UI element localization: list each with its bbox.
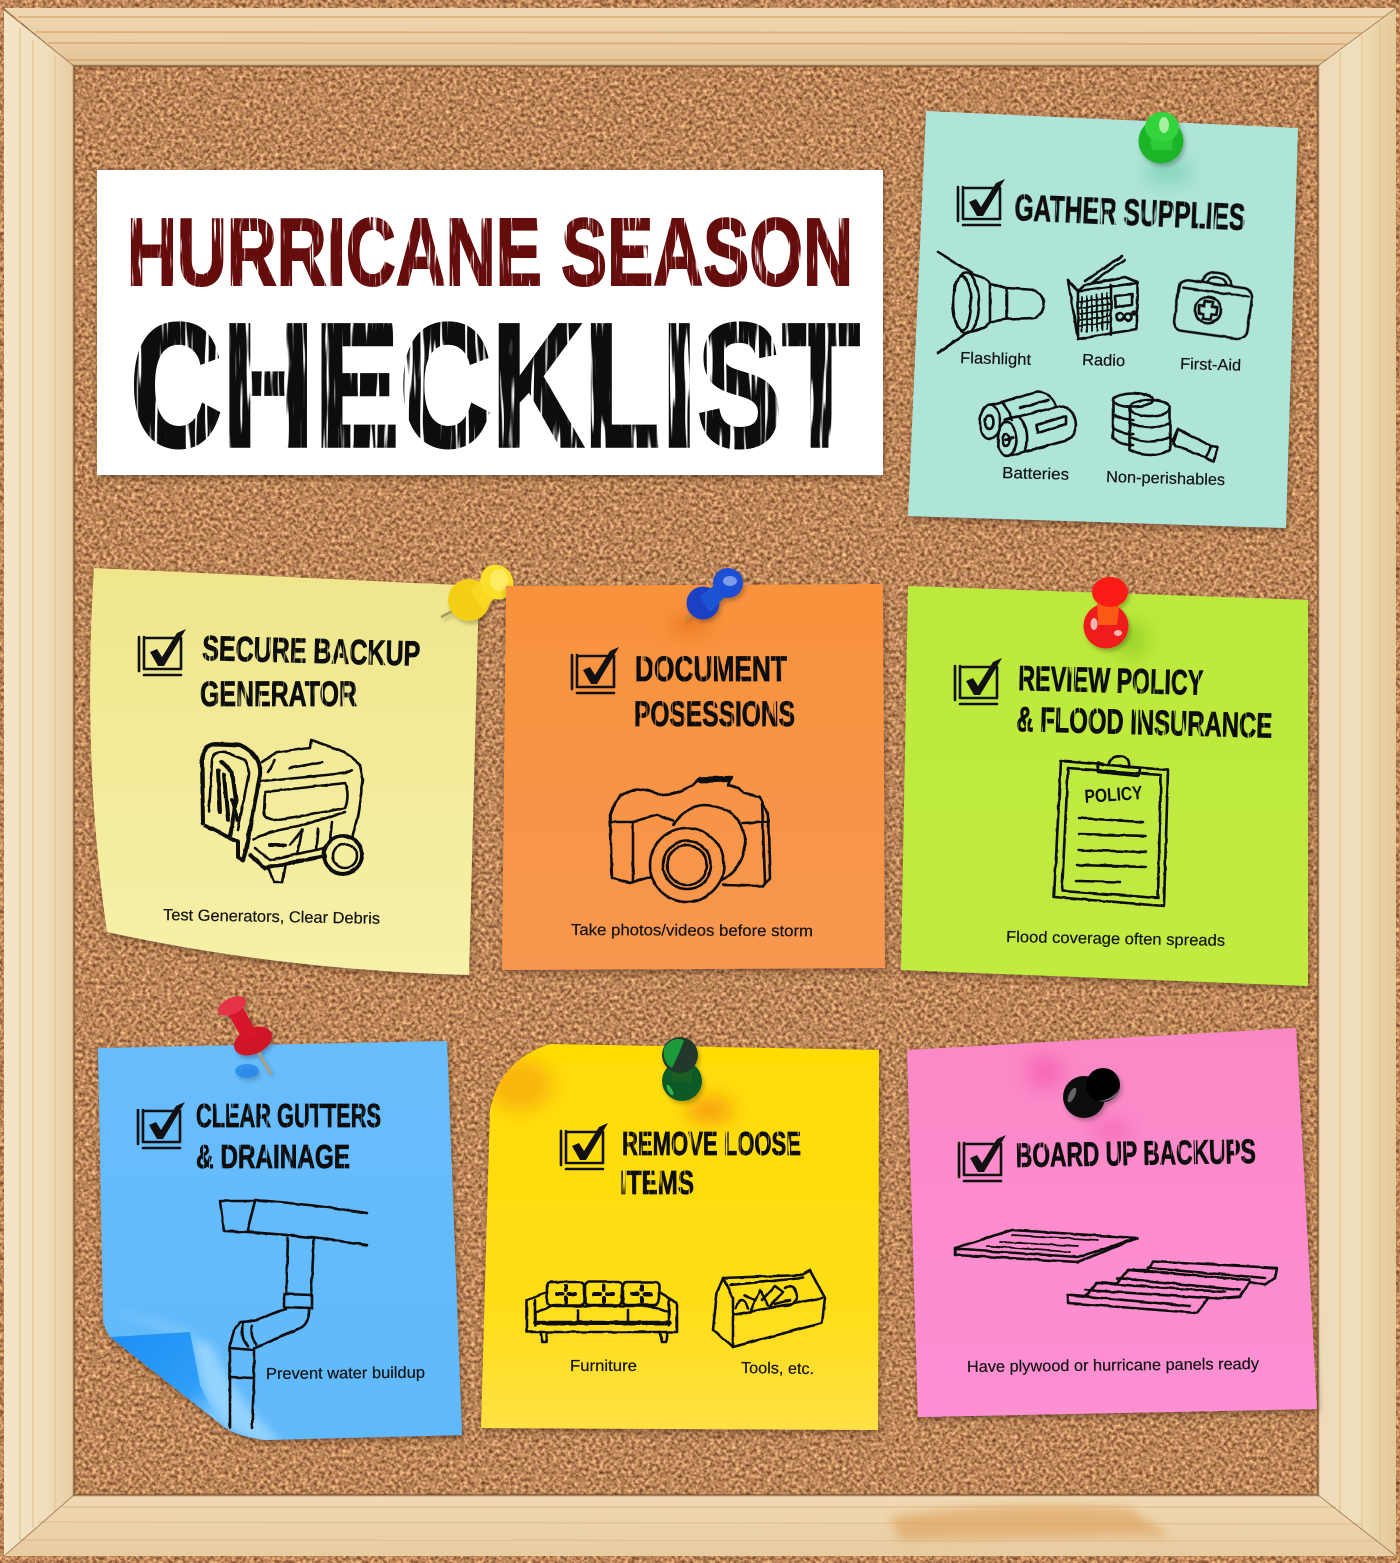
heading: secure backup generator: GENERATOR [200,675,357,714]
label: first-aid: First-Aid [1180,356,1241,375]
heading: clear gutters [196,1097,381,1175]
checkbox icon [958,179,1005,225]
checkbox icon [561,1123,608,1169]
caption: test generators: Test Generators, Clear Debris [163,907,380,928]
icon: flashlight [938,252,1044,353]
label: flashlight: Flashlight [960,350,1032,369]
panel: document possessions [502,584,885,970]
checkbox icon [959,1135,1006,1181]
label: tools: Tools, etc. [741,1360,814,1378]
caption: prevent water buildup: Prevent water buildup [266,1365,425,1383]
label: radio: Radio [1082,352,1125,370]
title line: Hurricane Season: HURRICANE SEASON [127,199,853,306]
icon: toolbox [713,1270,825,1347]
pin shadow on note [668,615,712,635]
pin: green [1138,112,1184,164]
pin: dark green [662,1037,702,1101]
icon: gutter and downspout [220,1200,367,1428]
icon: radio [1068,256,1137,339]
title line: Checklist: CHECKLIST [130,288,860,484]
page curl [110,1332,218,1422]
checkbox icon [955,658,1002,704]
caption: take photos: Take photos/videos before storm [571,922,813,940]
icon: policy clipboard [1054,756,1168,906]
heading: review policy [1016,659,1273,746]
heading: document posessions: DOCUMENT [635,650,787,689]
panel: review policy and flood insurance [901,586,1308,986]
pin: black [1063,1068,1120,1118]
label: non-perishables: Non-perishables [1106,469,1225,489]
icon: corrugated panels [1068,1261,1277,1313]
checkbox icon [139,629,186,675]
icon: camera [610,777,770,902]
panel: secure backup generator [90,568,479,975]
icon: batteries [980,392,1076,456]
curl highlight [140,1318,284,1440]
policy label on clipboard: POLICY [1084,783,1143,808]
heading: gather supplies: GATHER SUPPLIES [1014,187,1246,238]
label: batteries: Batteries [1002,465,1069,484]
checkbox icon [572,647,619,693]
heading: secure backup generator: SECURE BACKUP [202,629,421,674]
pin glows [1027,1056,1132,1140]
heading: document posessions: POSESSIONS [634,695,795,734]
pin: red [1084,577,1128,648]
heading: secure backup generator [200,629,421,714]
icon: first aid kit [1173,267,1255,340]
pin: blue [684,568,743,620]
heading: remove loose items: ITEMS [620,1164,694,1201]
pin shadow on note [1112,622,1148,658]
title card [97,170,883,484]
heading: document posessions [634,650,795,734]
panel: remove loose items [481,1044,879,1430]
icon: generator [202,740,363,882]
caption: flood coverage: Flood coverage often spreads [1006,929,1225,950]
orange glows [488,1059,734,1124]
heading: remove loose items: REMOVE LOOSE [622,1125,801,1162]
icon: non-perishables [1113,393,1218,462]
checkbox icon [138,1102,185,1148]
caption: plywood or panels: Have plywood or hurricane panels ready [967,1356,1259,1376]
heading: board up backups: BOARD UP BACKUPS [1015,1133,1256,1175]
pin shadow on note [1144,162,1192,182]
heading: review policy: REVIEW POLICY [1018,659,1204,703]
heading: clear gutters: & DRAINAGE [196,1138,350,1175]
heading: remove loose items [620,1125,801,1201]
panel: board up backups [907,1028,1317,1417]
pin: yellow [441,558,520,621]
heading: review policy: & FLOOD INSURANCE [1016,700,1273,746]
label: furniture: Furniture [570,1358,637,1375]
panel: gather supplies [908,111,1298,528]
pin: red angled [215,992,277,1078]
icon: plywood board [955,1230,1137,1262]
panel: clear gutters and drainage [95,1041,462,1445]
heading: clear gutters: CLEAR GUTTERS [196,1097,381,1134]
icon: sofa [527,1282,677,1342]
